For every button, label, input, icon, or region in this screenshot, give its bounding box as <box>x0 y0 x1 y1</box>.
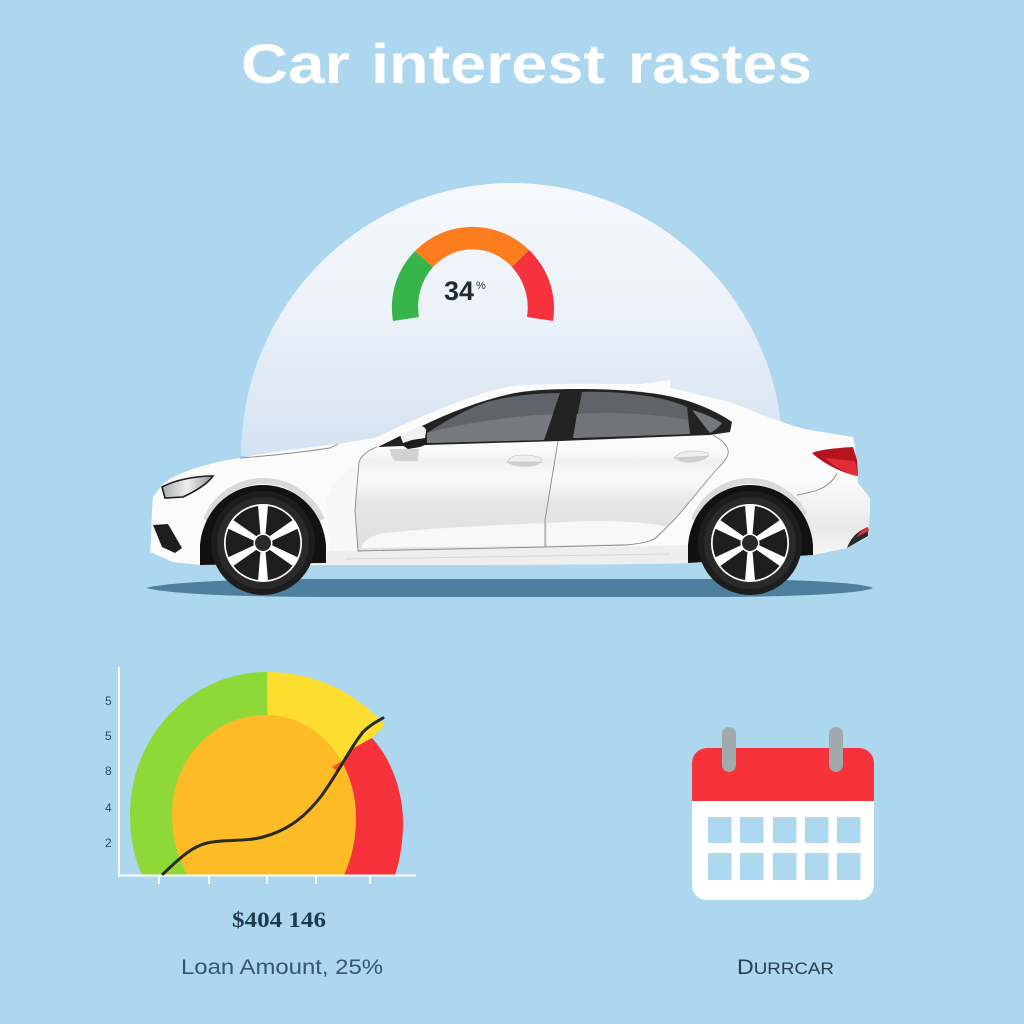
front window <box>427 393 560 443</box>
top gauge <box>392 227 554 321</box>
title <box>241 32 812 95</box>
gauge pointer <box>332 758 347 772</box>
sill crease <box>345 554 670 559</box>
backdrop dome <box>241 183 783 456</box>
ground shadow <box>146 579 873 597</box>
calendar page <box>692 748 874 900</box>
calendar header <box>692 748 874 801</box>
y axis <box>118 667 120 876</box>
tail light <box>812 447 858 476</box>
front door highlight strip <box>362 523 545 548</box>
loan caption: Loan Amount, 25% <box>181 956 383 979</box>
rear arch lip <box>694 481 805 520</box>
rocker sill <box>327 545 690 565</box>
y axis labels: 5 <box>105 694 112 708</box>
car <box>150 380 870 595</box>
front wing shading <box>326 465 357 552</box>
title: Car <box>241 32 350 95</box>
handle underside <box>507 462 542 467</box>
gauge segment: orange <box>415 227 529 267</box>
y axis labels: 5 <box>105 729 112 743</box>
y axis labels <box>105 694 112 850</box>
gauge segment: red <box>512 250 554 321</box>
quarter window <box>692 410 722 433</box>
handle top <box>507 455 542 462</box>
y axis labels: 8 <box>105 764 112 778</box>
rear door <box>545 435 728 547</box>
title: interest <box>371 32 605 95</box>
handle top <box>674 451 709 458</box>
side mirror base <box>378 436 427 449</box>
gauge segment: green <box>392 251 433 321</box>
mirror shadow <box>390 449 419 461</box>
car body <box>150 380 870 565</box>
gauge area: red <box>330 738 403 875</box>
rear door highlight strip <box>547 521 667 546</box>
rear window <box>573 392 690 438</box>
y axis labels: 4 <box>105 801 112 815</box>
rear door handle <box>674 451 709 463</box>
calendar icon <box>692 727 874 900</box>
calendar rings <box>722 727 843 772</box>
gauge area: green <box>130 672 268 875</box>
title: rastes <box>628 32 812 95</box>
headlight <box>162 476 213 498</box>
front arch lip <box>206 481 322 520</box>
handle underside <box>674 456 709 463</box>
mirror shell <box>400 426 426 443</box>
tail light lens <box>825 458 858 476</box>
gauge inner shape <box>172 715 356 875</box>
gauge percent sign: % <box>476 280 486 292</box>
loan chart <box>105 667 416 884</box>
front window lower tone <box>427 414 553 443</box>
calendar caption: DURRCAR <box>737 956 834 979</box>
trend line <box>163 718 383 874</box>
front air intake <box>153 524 182 553</box>
y axis labels: 2 <box>105 836 112 850</box>
door seams <box>240 435 837 551</box>
front door handle <box>507 455 542 467</box>
front door <box>355 441 558 551</box>
loan value: $404 146 <box>232 907 326 932</box>
gauge area: yellow <box>267 672 385 760</box>
window frame <box>378 389 732 447</box>
front wheel <box>211 491 315 595</box>
rear quarter shading <box>745 476 870 555</box>
calendar day cells <box>708 817 860 880</box>
rear window lower tone <box>573 413 690 438</box>
rear reflector <box>847 527 868 548</box>
rear wheel arch <box>688 485 813 563</box>
front wheel arch <box>200 485 326 565</box>
reflector red sliver <box>857 527 869 537</box>
x axis <box>118 876 416 884</box>
rear wheel <box>698 491 802 595</box>
gauge value: 34 <box>444 276 474 306</box>
